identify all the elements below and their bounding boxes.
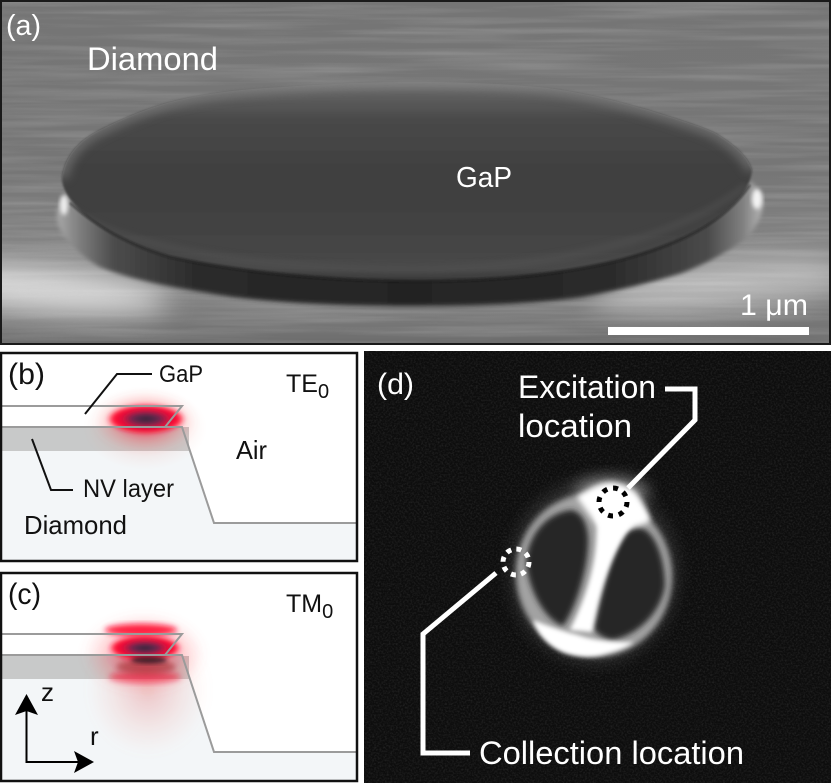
label Diamond: Diamond bbox=[87, 41, 218, 77]
label GaP on disk: GaP bbox=[456, 162, 512, 194]
label c: (c) bbox=[8, 578, 41, 611]
GaP and diamond outline bbox=[0, 634, 358, 752]
collection location label: Collection location bbox=[479, 735, 744, 771]
panel b: TE0 mode bbox=[0, 353, 358, 562]
GaP and diamond outline bbox=[0, 406, 358, 523]
Diamond label: Diamond bbox=[24, 510, 127, 540]
excitation location label: location bbox=[518, 408, 632, 444]
dark right lobe bbox=[594, 528, 665, 640]
TE0 field profile bbox=[92, 391, 198, 460]
NV layer band bbox=[0, 656, 189, 679]
TM0 label: 0 bbox=[322, 601, 333, 623]
axes arrows z and r bbox=[15, 694, 94, 773]
TE0 label: 0 bbox=[318, 381, 329, 403]
axis label z: z bbox=[41, 677, 54, 707]
TM0 field profile bbox=[88, 615, 202, 740]
GaP disk top face bbox=[62, 82, 752, 281]
GaP leader line bbox=[85, 374, 152, 414]
NV layer label: NV layer bbox=[83, 475, 174, 503]
GaP label: GaP bbox=[159, 361, 203, 388]
panel b frame bbox=[1, 353, 357, 561]
panel d: photoluminescence image bbox=[364, 351, 831, 783]
panel a frame bbox=[1, 1, 830, 344]
scale label: 1 μm bbox=[740, 289, 808, 322]
TE0 label: TE bbox=[286, 370, 318, 398]
panel c: TM0 mode bbox=[0, 573, 358, 783]
excitation leader line bbox=[628, 389, 695, 488]
Air label: Air bbox=[236, 435, 267, 465]
bright spoke bbox=[570, 515, 634, 632]
bright excitation spot bbox=[576, 478, 648, 506]
excitation marker circle bbox=[599, 488, 627, 516]
disk pedestal bbox=[55, 181, 765, 309]
axis label r: r bbox=[90, 721, 99, 751]
bright lower crescent bbox=[533, 620, 634, 657]
NV layer band bbox=[0, 427, 189, 451]
diamond surface streaks bbox=[0, 0, 831, 345]
dark left lobe bbox=[526, 510, 588, 626]
NV layer leader bbox=[32, 439, 73, 490]
label b: (b) bbox=[8, 358, 45, 391]
collection marker circle bbox=[503, 549, 529, 575]
diamond substrate bbox=[2, 451, 356, 560]
collection leader line bbox=[423, 573, 496, 753]
scale bar bbox=[608, 327, 809, 335]
TM0 label: TM bbox=[286, 590, 322, 618]
excitation location label: Excitation bbox=[518, 369, 656, 405]
thin gap line between disk and pedestal bbox=[70, 185, 750, 281]
label d: (d) bbox=[377, 368, 414, 401]
diamond substrate bbox=[2, 679, 356, 780]
panel a: SEM micrograph of GaP disk on diamond bbox=[0, 0, 831, 345]
panel c frame bbox=[1, 573, 357, 781]
microdisk ring glow bbox=[501, 478, 687, 671]
excitation location label bbox=[518, 369, 656, 444]
label a: (a) bbox=[6, 10, 41, 42]
